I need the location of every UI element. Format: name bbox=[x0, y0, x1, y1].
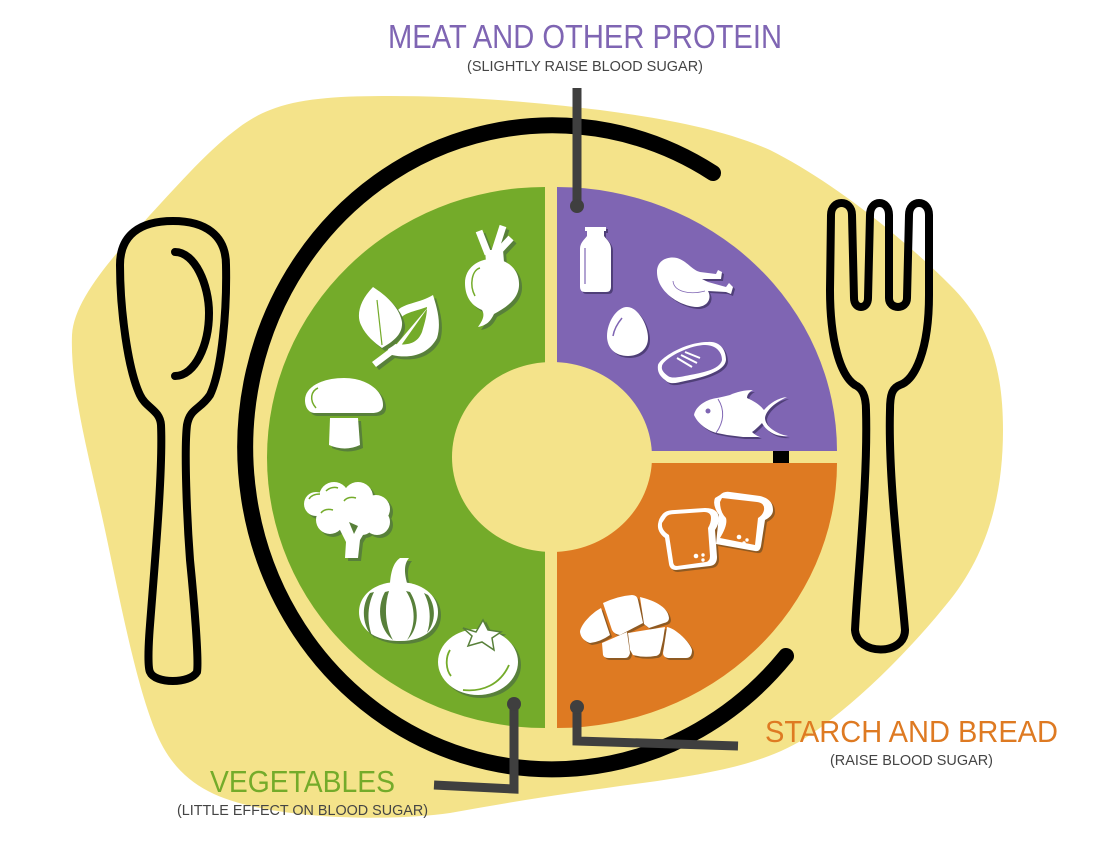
heading: starch and bread: STARCH AND BREAD bbox=[765, 714, 1058, 749]
panel: protein segment bbox=[557, 187, 837, 451]
icon: chicken bbox=[657, 258, 733, 307]
connector: starch bbox=[570, 700, 738, 746]
connector: protein bbox=[570, 88, 584, 213]
plate rim arc bbox=[245, 125, 786, 769]
icon: leaves bbox=[359, 287, 439, 367]
heading: vegetables: VEGETABLES bbox=[210, 764, 395, 799]
center plate circle bbox=[452, 362, 652, 552]
icon: mushroom bbox=[305, 378, 383, 448]
icon: bread slices bbox=[658, 492, 773, 570]
icon: fork bbox=[830, 203, 929, 650]
text: slightly raise blood sugar: (SLIGHTLY RAISE BLOOD SUGAR) bbox=[467, 58, 703, 75]
icon: tomato bbox=[438, 620, 518, 695]
icon: egg bbox=[607, 307, 648, 356]
icon: spoon bbox=[120, 221, 226, 681]
icon: fish bbox=[694, 390, 788, 437]
icon: milk bottle bbox=[580, 227, 611, 292]
icon: beet bbox=[465, 226, 519, 327]
panel: vegetables segment bbox=[267, 187, 545, 728]
background yellow blob bbox=[72, 96, 1003, 818]
icon: broccoli bbox=[304, 482, 390, 558]
icon: pumpkin bbox=[359, 558, 438, 641]
text: little effect on blood sugar: (LITTLE EFFECT ON BLOOD SUGAR) bbox=[177, 802, 428, 819]
icon: croissant bbox=[580, 595, 692, 658]
icon: steak bbox=[658, 342, 726, 383]
connector: vegetables bbox=[434, 697, 521, 789]
heading: meat and other protein: MEAT AND OTHER PROTEIN bbox=[388, 18, 782, 55]
text: raise blood sugar: (RAISE BLOOD SUGAR) bbox=[830, 752, 993, 769]
panel: starch segment bbox=[557, 463, 837, 728]
